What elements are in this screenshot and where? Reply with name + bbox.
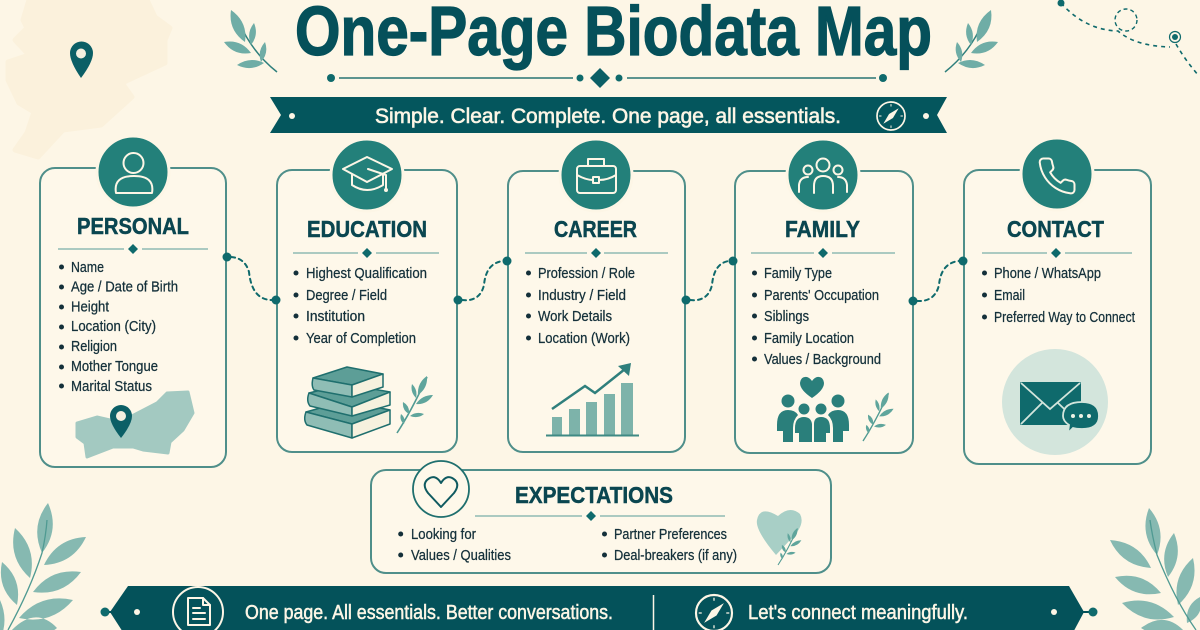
panel: personal bbox=[40, 136, 226, 467]
leaf branch bottom-left bbox=[0, 503, 86, 630]
icon: graduation cap bbox=[331, 139, 403, 211]
divider: family bbox=[751, 248, 895, 258]
icon: education sprig bbox=[397, 376, 433, 433]
panel: expectations bbox=[371, 461, 831, 573]
list: personal fields: Mother Tongue bbox=[71, 359, 158, 375]
heading: career: CAREER bbox=[554, 216, 637, 242]
map: top-left background bbox=[8, 0, 170, 157]
icon: heart outline bbox=[413, 461, 469, 517]
list: career fields: Work Details bbox=[538, 309, 612, 325]
panel: career bbox=[508, 139, 685, 452]
icon: region map with pin bbox=[77, 392, 193, 457]
list: family fields: Values / Background bbox=[764, 352, 881, 368]
divider: personal bbox=[58, 244, 208, 254]
list: family fields: Siblings bbox=[764, 309, 809, 325]
list: personal fields: Height bbox=[71, 300, 109, 316]
heading: education: EDUCATION bbox=[307, 216, 427, 242]
list: career fields: Profession / Role bbox=[538, 266, 635, 282]
list: contact fields: Preferred Way to Connect bbox=[994, 310, 1135, 326]
icon: footer compass bbox=[696, 595, 732, 630]
list: family fields: Parents' Occupation bbox=[764, 288, 879, 304]
panel: family bbox=[735, 139, 913, 453]
list: expectations left: Values / Qualities bbox=[411, 548, 511, 564]
heading: family: FAMILY bbox=[785, 216, 860, 242]
list: personal fields bbox=[59, 260, 178, 395]
subtitle ribbon: Simple. Clear. Complete. One page, all essentials. bbox=[375, 105, 841, 128]
title divider bbox=[327, 68, 887, 88]
footer text: left: One page. All essentials. Better conversations. bbox=[245, 602, 613, 624]
list: personal fields: Religion bbox=[71, 339, 117, 355]
list: contact fields: Phone / WhatsApp bbox=[994, 266, 1101, 282]
icon: document bbox=[173, 587, 223, 630]
list: family fields: Family Type bbox=[764, 266, 832, 282]
panel: education bbox=[277, 139, 457, 452]
list: career fields bbox=[526, 266, 635, 347]
list: education fields: Institution bbox=[306, 309, 365, 325]
list: expectations left: Looking for bbox=[411, 527, 476, 543]
list: personal fields: Name bbox=[71, 260, 104, 276]
divider: expectations bbox=[475, 511, 725, 521]
icon: location pin top-left bbox=[70, 42, 93, 78]
footer text: right: Let's connect meaningfully. bbox=[748, 602, 968, 624]
icon: right leaf sprig by title bbox=[945, 10, 998, 72]
route decoration top-right bbox=[1058, 0, 1199, 76]
heading: personal: PERSONAL bbox=[77, 213, 189, 239]
list: education fields: Highest Qualification bbox=[306, 266, 427, 282]
leaf branch bottom-right bbox=[1110, 508, 1200, 630]
list: expectations left bbox=[398, 527, 511, 564]
list: expectations right: Partner Preferences bbox=[614, 527, 727, 543]
list: education fields: Year of Completion bbox=[306, 331, 416, 347]
subtitle ribbon bbox=[270, 97, 947, 133]
divider: career bbox=[525, 248, 668, 258]
icon: envelope and chat bubble bbox=[1002, 349, 1108, 455]
icon: family with heart bbox=[777, 377, 849, 442]
list: family fields bbox=[752, 266, 881, 368]
icon: briefcase bbox=[560, 139, 632, 211]
chart: rising bars with arrow bbox=[546, 363, 639, 436]
list: personal fields: Marital Status bbox=[71, 379, 152, 395]
divider: education bbox=[293, 248, 439, 258]
list: career fields: Location (Work) bbox=[538, 331, 630, 347]
list: personal fields: Age / Date of Birth bbox=[71, 280, 178, 296]
list: expectations right: Deal-breakers (if any) bbox=[614, 548, 737, 564]
list: contact fields: Email bbox=[994, 288, 1025, 304]
icon: stack of books bbox=[305, 367, 390, 438]
icon: soft heart with sprig bbox=[757, 510, 802, 565]
list: contact fields bbox=[982, 266, 1135, 326]
list: career fields: Industry / Field bbox=[538, 288, 626, 304]
icon: family sprig bbox=[863, 393, 894, 441]
list: expectations right bbox=[602, 527, 737, 564]
icon: group of people bbox=[787, 139, 859, 211]
panel: contact bbox=[964, 138, 1151, 464]
icon: phone bbox=[1021, 138, 1093, 210]
divider: contact bbox=[982, 248, 1132, 258]
footer banner bbox=[100, 586, 1098, 630]
connectors between cards bbox=[222, 252, 968, 306]
list: education fields bbox=[294, 266, 427, 347]
icon: person bbox=[97, 136, 169, 208]
list: personal fields: Location (City) bbox=[71, 319, 156, 335]
list: family fields: Family Location bbox=[764, 331, 854, 347]
heading: contact: CONTACT bbox=[1007, 216, 1105, 242]
list: education fields: Degree / Field bbox=[306, 288, 387, 304]
heading: expectations: EXPECTATIONS bbox=[515, 482, 673, 508]
icon: left leaf sprig by title bbox=[224, 10, 277, 72]
